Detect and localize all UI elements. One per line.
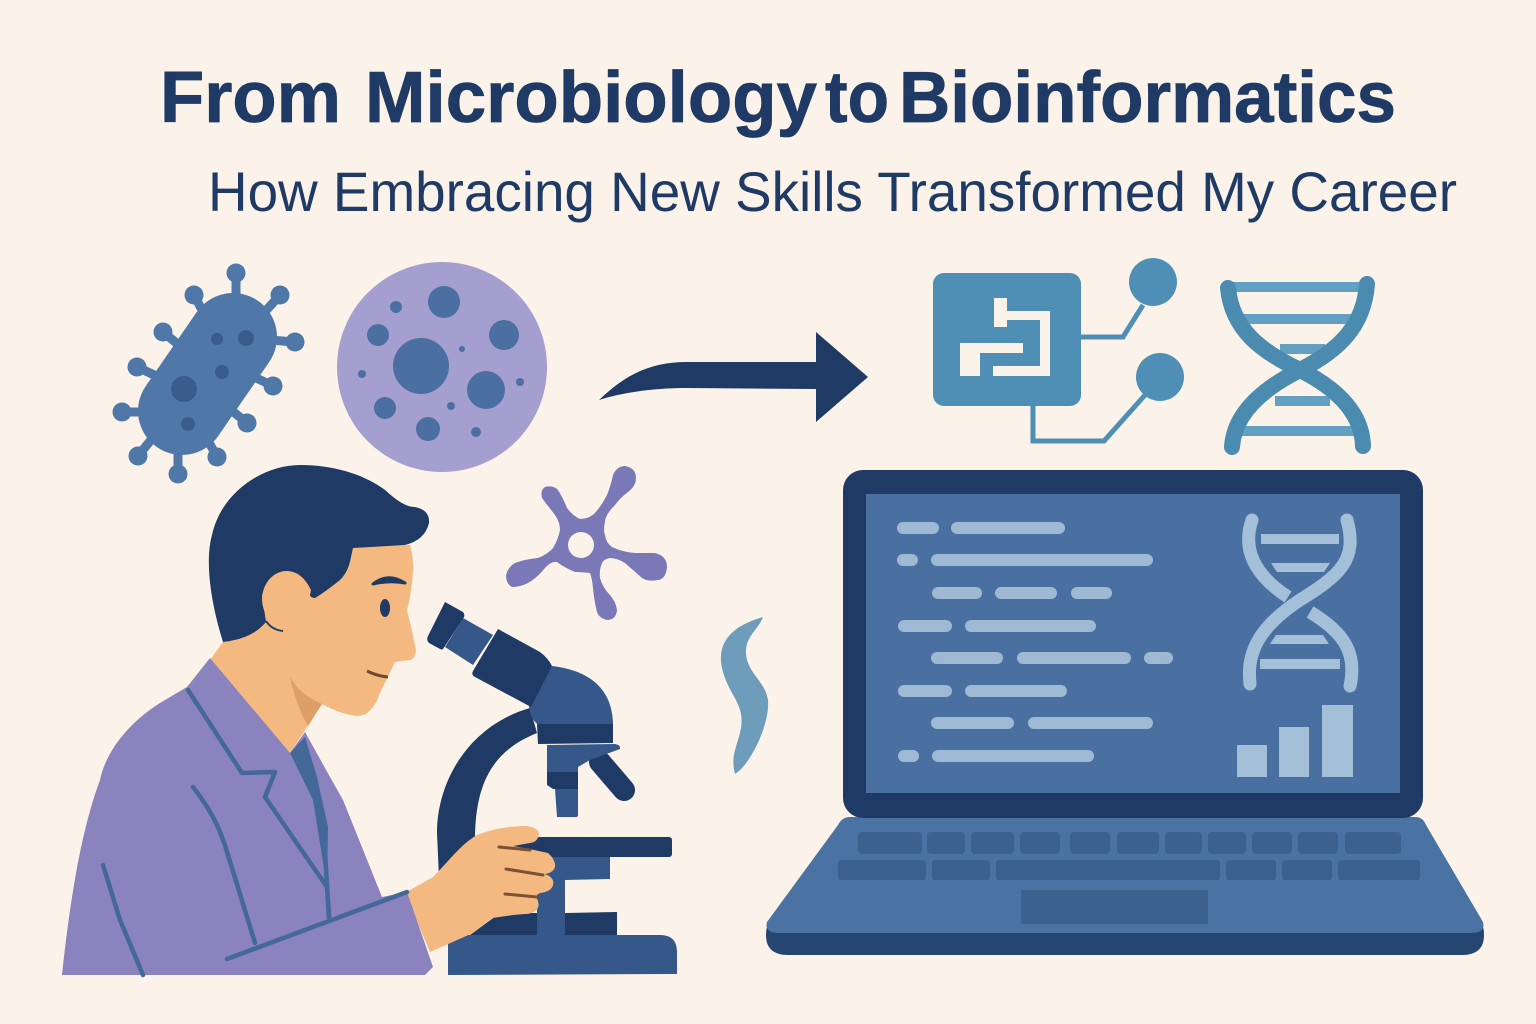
laptop lip — [766, 925, 1484, 955]
title: Bioinformatics — [899, 58, 1396, 138]
lab coat — [62, 658, 433, 975]
subtitle: How Embracing New Skills Transformed My Career — [208, 160, 1457, 223]
title — [160, 58, 1396, 138]
title: Microbiology — [365, 58, 817, 138]
title: From — [160, 58, 341, 138]
laptop screen — [843, 470, 1423, 818]
title: to — [825, 58, 889, 138]
eyepiece — [445, 618, 493, 665]
icon: laptop — [766, 470, 1484, 955]
icon: DNA double helix — [1228, 284, 1367, 447]
coat lapels and seams — [103, 690, 407, 975]
icon: bacterium — [112, 264, 304, 484]
icon: circuit chip with nodes — [933, 258, 1184, 441]
icon: microscope — [427, 602, 677, 975]
finger creases — [499, 847, 543, 897]
microscope head — [529, 666, 613, 724]
microscope base — [448, 935, 677, 975]
microscope stage — [537, 857, 565, 935]
neck and face — [210, 545, 416, 753]
arrow: transition to bioinformatics — [599, 332, 868, 422]
hand — [405, 826, 555, 952]
microscope arm — [437, 708, 537, 878]
screen DNA helix — [1244, 514, 1356, 692]
facial features — [266, 578, 405, 677]
screen bar chart — [1237, 705, 1353, 777]
ear — [262, 571, 311, 632]
laptop base — [767, 817, 1483, 933]
keyboard — [838, 832, 1420, 924]
icon: star-shaped microbe — [506, 466, 667, 620]
icon: squiggle microbe — [721, 617, 768, 774]
hair — [209, 465, 429, 642]
code lines — [897, 522, 1173, 762]
microscope objectives — [600, 762, 624, 790]
neck shadow — [290, 677, 322, 726]
scientist — [62, 465, 555, 975]
shirt — [290, 737, 328, 887]
icon: round microbe cell — [337, 262, 547, 472]
